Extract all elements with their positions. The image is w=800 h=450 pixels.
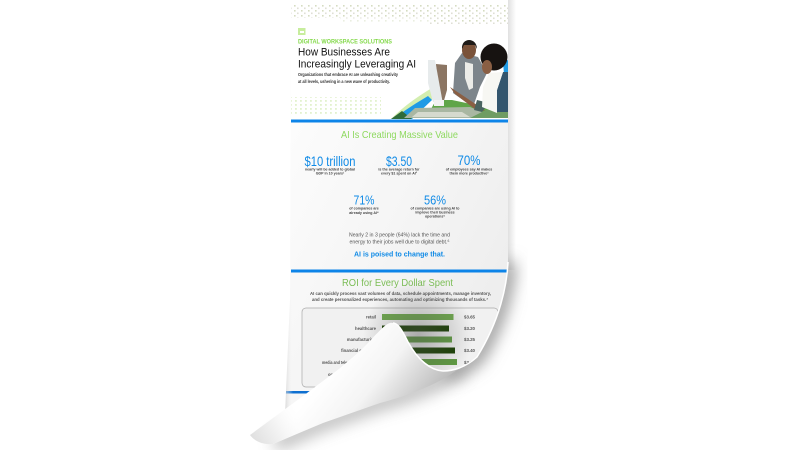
- bar chart: manufacturing: [347, 337, 376, 342]
- man: [453, 53, 487, 107]
- digital debt text: Nearly 2 in 3 people (64%) lack the time and: [349, 232, 450, 238]
- bar chart: $3.40: [464, 348, 476, 353]
- blue divider: [291, 270, 508, 272]
- heading: AI Is Creating Massive Value: [341, 129, 458, 141]
- stat: $3.50: is the average return for: [378, 168, 420, 172]
- description: and create personalized experiences, automating and optimizing thousands of tasks.⁷: [312, 297, 488, 302]
- digital debt text: [349, 232, 450, 246]
- digital debt text: energy to their jobs well due to digital debt.⁶: [350, 238, 450, 246]
- page side shadow: [508, 0, 516, 270]
- stat: $3.50: $3.50: [386, 153, 412, 169]
- stat: 56%: of companies are using AI to: [410, 206, 460, 210]
- panel: ROI: [284, 277, 508, 394]
- decorative dot band: [291, 5, 508, 18]
- blue divider: [291, 120, 508, 122]
- stat: $10 trillion: [304, 156, 355, 176]
- stat: $10 trillion: $10 trillion: [304, 153, 356, 169]
- bar chart: retail: [366, 314, 376, 320]
- document page: [285, 5, 508, 409]
- subtitle: at all levels, ushering in a new wave of productivity.: [298, 79, 390, 84]
- photo: colleagues at a monitor: [391, 40, 508, 119]
- bar chart: $3.25: [464, 337, 476, 342]
- stat: 56%: improve their business: [415, 210, 455, 214]
- subtitle: [298, 72, 398, 84]
- stat: $10 trillion: nearly will be added to global: [305, 168, 355, 172]
- page curl: [250, 262, 508, 444]
- curl outer shadow: [275, 262, 508, 444]
- stat: 70%: 70%: [458, 152, 480, 168]
- title: [298, 46, 416, 70]
- panel: massive value: [304, 129, 492, 258]
- bar chart: $3.65: [464, 314, 476, 320]
- subtitle: Organizations that embrace AI are unleashing creativity: [298, 72, 398, 77]
- bar chart: [302, 308, 498, 387]
- bar chart: $3.20: [464, 326, 476, 331]
- title: How Businesses Are: [298, 46, 390, 58]
- stat: 56%: operations⁵: [425, 214, 445, 218]
- stat: $3.50: [378, 156, 420, 176]
- panel: header: [291, 0, 508, 120]
- bar chart: $3.50: [464, 360, 476, 365]
- heading: ROI for Every Dollar Spent: [342, 277, 453, 289]
- stat: 70%: [446, 156, 492, 176]
- stat: 71%: 71%: [354, 192, 375, 208]
- description: AI can quickly process vast volumes of data, schedule appointments, manage inventory,: [310, 291, 491, 296]
- stat: 56%: [410, 196, 460, 218]
- stat: $10 trillion: GDP in 10 years¹: [316, 172, 345, 176]
- stat: 70%: of employees say AI makes: [446, 168, 492, 172]
- bar chart: financial services: [341, 348, 377, 353]
- bar chart: healthcare: [355, 326, 377, 331]
- stat: 56%: 56%: [424, 192, 446, 208]
- blue footer bar: [286, 391, 310, 394]
- woman: [450, 87, 485, 111]
- monitor: [436, 64, 447, 104]
- stat: $3.50: every $1 spent on AI²: [381, 172, 418, 176]
- bar chart: media and telecommunications: [322, 360, 377, 365]
- description: [310, 291, 491, 302]
- bar chart: operations and logistics: [328, 372, 377, 377]
- curl tip shading: [250, 393, 307, 444]
- curl cast shadow: [370, 286, 466, 370]
- stat: 71%: already using AI⁴: [349, 211, 379, 215]
- decorative lower dots: [291, 97, 381, 115]
- stat: 71%: [349, 196, 379, 215]
- stat: 71%: of companies are: [349, 206, 379, 210]
- icon: badge: [298, 28, 306, 35]
- left edge shade: [285, 344, 292, 409]
- callout: AI is poised to change that.: [354, 250, 445, 258]
- title: Increasingly Leveraging AI: [298, 58, 416, 70]
- eyebrow: DIGITAL WORKSPACE SOLUTIONS: [298, 38, 392, 46]
- stat: 70%: them more productive³: [450, 172, 489, 176]
